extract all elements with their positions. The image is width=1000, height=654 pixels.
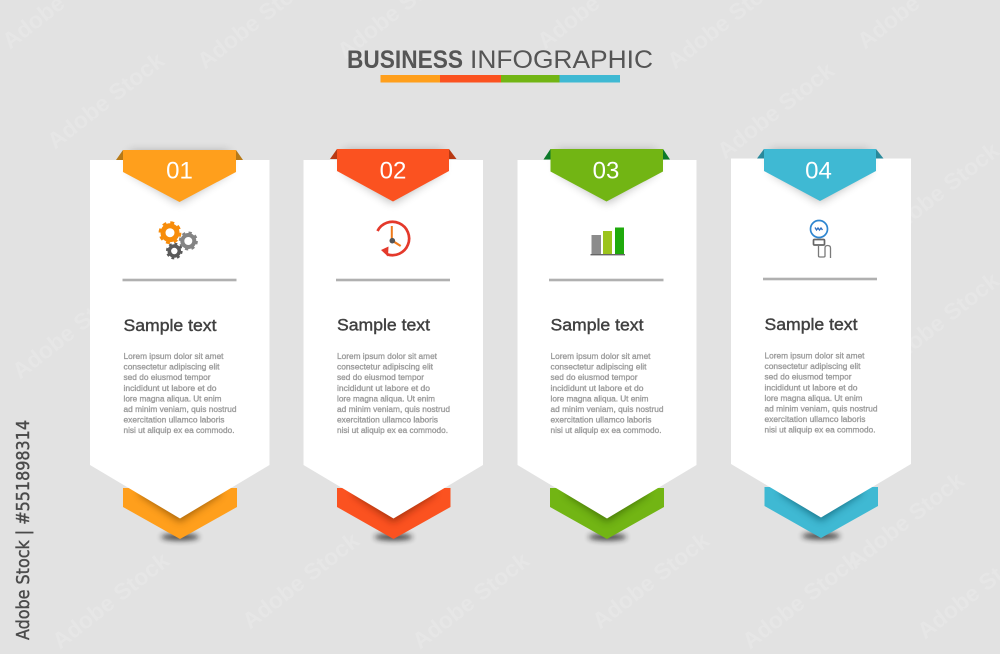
number 02: 02 <box>380 157 406 184</box>
panel: step 02 <box>304 149 483 540</box>
body text: consectetur adipiscing elit <box>764 361 861 371</box>
heading: Sample text <box>550 316 644 334</box>
title: BUSINESS <box>347 46 463 74</box>
body text: Lorem ipsum dolor sit amet <box>124 351 224 361</box>
text: Adobe Stock <box>42 47 169 154</box>
body text: ad minim veniam, quis nostrud <box>550 404 664 414</box>
title: INFOGRAPHIC <box>470 46 653 74</box>
body text: incididunt ut labore et do <box>337 383 430 393</box>
body text: incididunt ut labore et do <box>124 383 217 393</box>
body text: lore magna aliqua. Ut enim <box>337 394 435 404</box>
number 01: 01 <box>166 157 193 184</box>
body text: sed do eiusmod tempor <box>764 372 852 382</box>
body text: consectetur adipiscing elit <box>124 362 220 372</box>
divider <box>122 279 236 281</box>
panel: step 01 <box>90 150 270 540</box>
text: Adobe Stock <box>587 527 714 634</box>
icon: bar chart <box>590 228 625 255</box>
body text: Lorem ipsum dolor sit amet <box>764 350 865 360</box>
text: Adobe Stock <box>407 547 534 654</box>
body text: Lorem ipsum dolor sit amet <box>550 351 651 361</box>
body text: exercitation ullamco laboris <box>764 414 866 424</box>
body text: incididunt ut labore et do <box>764 382 858 392</box>
body text: lore magna aliqua. Ut enim <box>550 394 648 404</box>
body text: nisi ut aliquip ex ea commodo. <box>124 425 234 435</box>
body text: sed do eiusmod tempor <box>337 372 424 382</box>
body text: nisi ut aliquip ex ea commodo. <box>764 424 876 434</box>
body text: ad minim veniam, quis nostrud <box>764 404 878 414</box>
text: Adobe Stock <box>237 527 364 634</box>
body text: nisi ut aliquip ex ea commodo. <box>550 425 662 435</box>
body text: sed do eiusmod tempor <box>550 372 638 382</box>
heading: Sample text <box>124 317 217 335</box>
number 03: 03 <box>593 157 619 184</box>
stock credit: Adobe Stock | #551898314 <box>14 420 34 640</box>
icon: clock <box>378 222 409 256</box>
title <box>347 46 653 74</box>
panel: step 04 <box>731 149 911 540</box>
body text: exercitation ullamco laboris <box>550 414 652 424</box>
icon: gears <box>160 223 197 258</box>
body text: consectetur adipiscing elit <box>337 362 434 372</box>
heading: Sample text <box>764 316 858 334</box>
text: Adobe Stock <box>842 467 969 574</box>
body text: lore magna aliqua. Ut enim <box>124 394 222 404</box>
body text: ad minim veniam, quis nostrud <box>337 404 450 414</box>
icon: light bulb <box>810 220 830 258</box>
title colour bar <box>380 75 620 82</box>
heading: Sample text <box>337 316 430 334</box>
body text: incididunt ut labore et do <box>550 383 644 393</box>
divider <box>763 278 877 280</box>
body text: sed do eiusmod tempor <box>124 372 211 382</box>
body text <box>550 351 664 435</box>
body text: exercitation ullamco laboris <box>124 414 224 424</box>
body text: lore magna aliqua. Ut enim <box>764 393 862 403</box>
body text: Lorem ipsum dolor sit amet <box>337 351 438 361</box>
body text <box>124 351 237 435</box>
divider <box>336 279 450 281</box>
body text: exercitation ullamco laboris <box>337 414 438 424</box>
text: Adobe Stock <box>47 547 174 654</box>
divider <box>549 279 664 281</box>
text: Adobe Stock <box>737 547 864 654</box>
body text <box>764 350 878 434</box>
body text: nisi ut aliquip ex ea commodo. <box>337 425 448 435</box>
text: Adobe Stock <box>712 57 839 164</box>
text: Adobe Stock <box>7 277 134 384</box>
number 04: 04 <box>805 157 832 184</box>
body text <box>337 351 450 435</box>
body text: ad minim veniam, quis nostrud <box>124 404 237 414</box>
panel: step 03 <box>518 149 696 540</box>
body text: consectetur adipiscing elit <box>550 362 647 372</box>
